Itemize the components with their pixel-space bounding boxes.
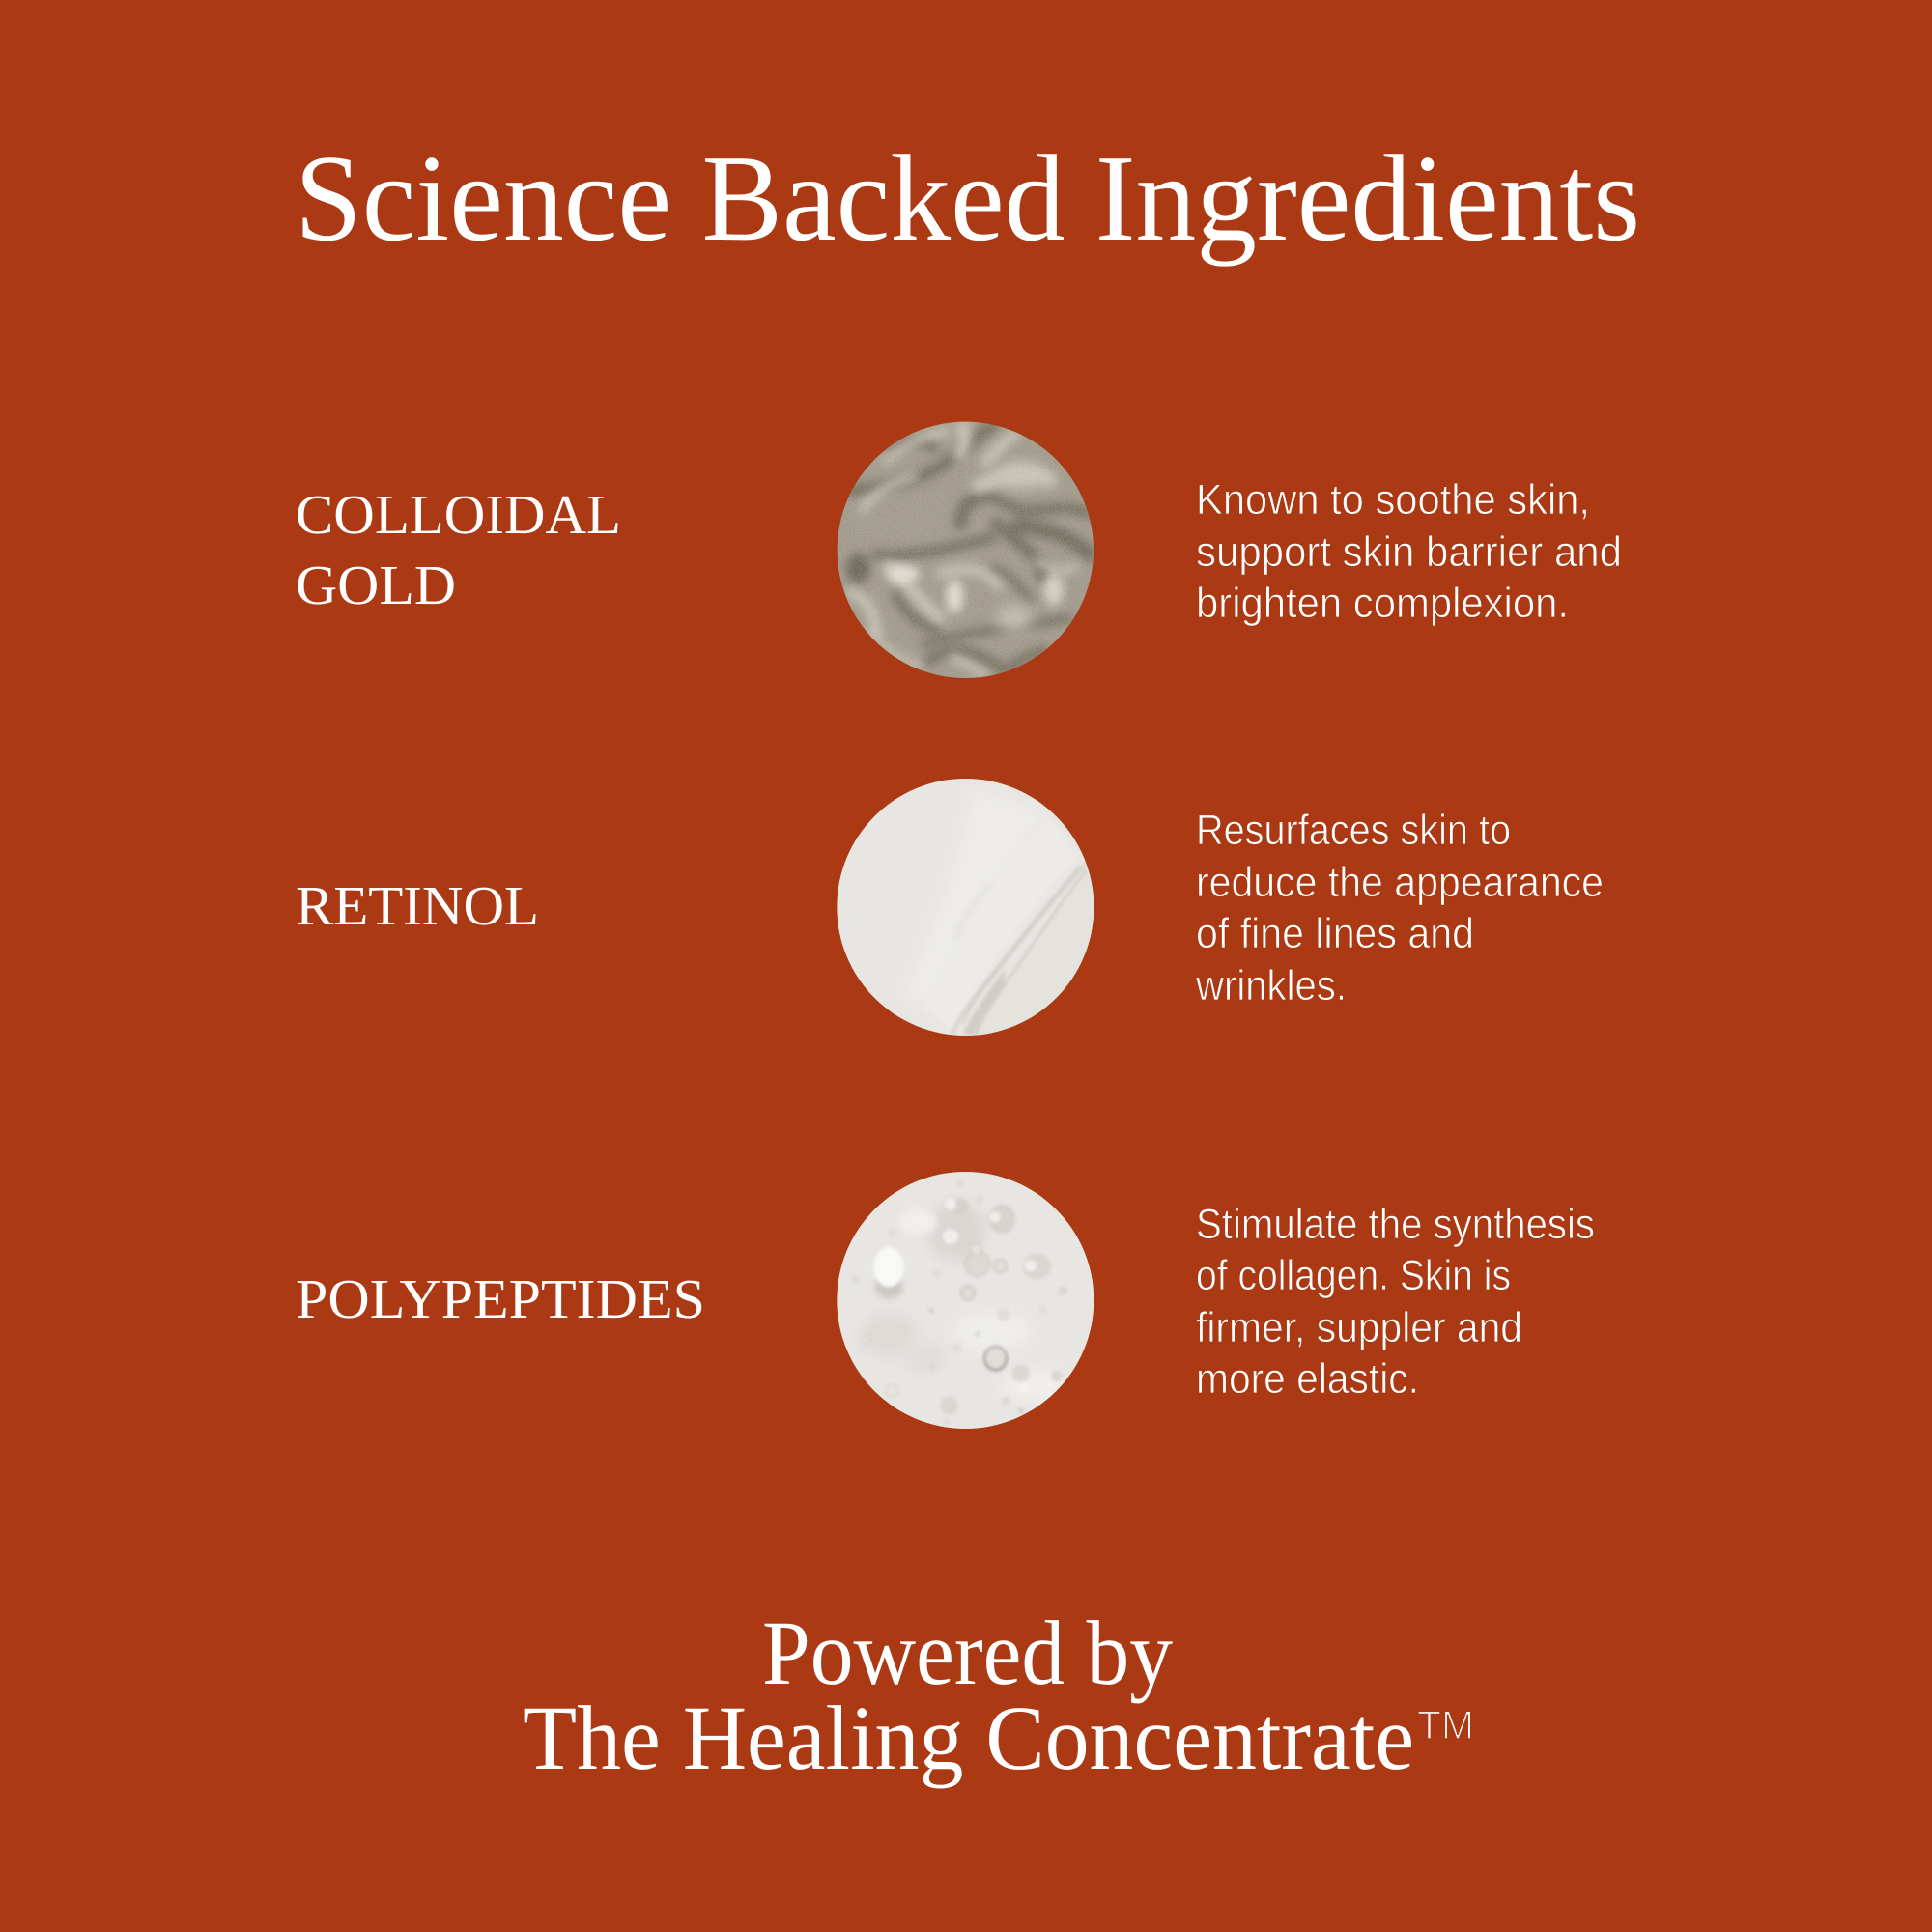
description: retinol xyxy=(1195,807,1604,1009)
ingredient name: colloidal gold: COLLOIDAL xyxy=(296,483,621,546)
image: gel with bubbles xyxy=(831,1164,1101,1435)
image: retinol cream texture xyxy=(831,773,1101,1043)
description: colloidal gold: Known to soothe skin, xyxy=(1196,476,1590,524)
footer heading: The Healing Concentrate xyxy=(523,1687,1414,1789)
ingredient name: retinol: RETINOL xyxy=(296,874,539,937)
description: retinol: Resurfaces skin to xyxy=(1196,807,1511,854)
description: colloidal gold: support skin barrier and xyxy=(1196,528,1622,576)
panel: colloidal gold xyxy=(296,415,1622,686)
bubble, lower centre xyxy=(983,1346,1008,1372)
ingredient name: colloidal gold xyxy=(296,483,621,616)
description: retinol: reduce the appearance xyxy=(1196,859,1604,906)
description: colloidal gold xyxy=(1196,476,1622,627)
footer heading: TM xyxy=(1417,1702,1474,1747)
ingredient name: colloidal gold: GOLD xyxy=(296,554,456,616)
bubble cluster xyxy=(850,1179,1067,1426)
image: silver-gold swirl texture xyxy=(837,421,1094,678)
description: polypeptides: firmer, suppler and xyxy=(1196,1304,1522,1351)
ingredient name: polypeptides: POLYPEPTIDES xyxy=(296,1267,705,1330)
panel: retinol xyxy=(296,773,1604,1043)
description: retinol: wrinkles. xyxy=(1195,962,1347,1009)
description: colloidal gold: brighten complexion. xyxy=(1196,580,1569,627)
description: polypeptides: Stimulate the synthesis xyxy=(1196,1201,1595,1248)
title: Science Backed Ingredients xyxy=(295,129,1640,267)
description: retinol: of fine lines and xyxy=(1196,910,1474,957)
description: polypeptides: more elastic. xyxy=(1196,1355,1419,1403)
description: polypeptides xyxy=(1196,1201,1595,1403)
footer heading xyxy=(523,1602,1474,1789)
large bubble, left xyxy=(873,1247,904,1298)
panel: polypeptides xyxy=(296,1164,1595,1435)
footer heading: Powered by xyxy=(762,1602,1173,1704)
description: polypeptides: of collagen. Skin is xyxy=(1196,1252,1511,1299)
liquid edge strokes xyxy=(952,865,1085,1036)
